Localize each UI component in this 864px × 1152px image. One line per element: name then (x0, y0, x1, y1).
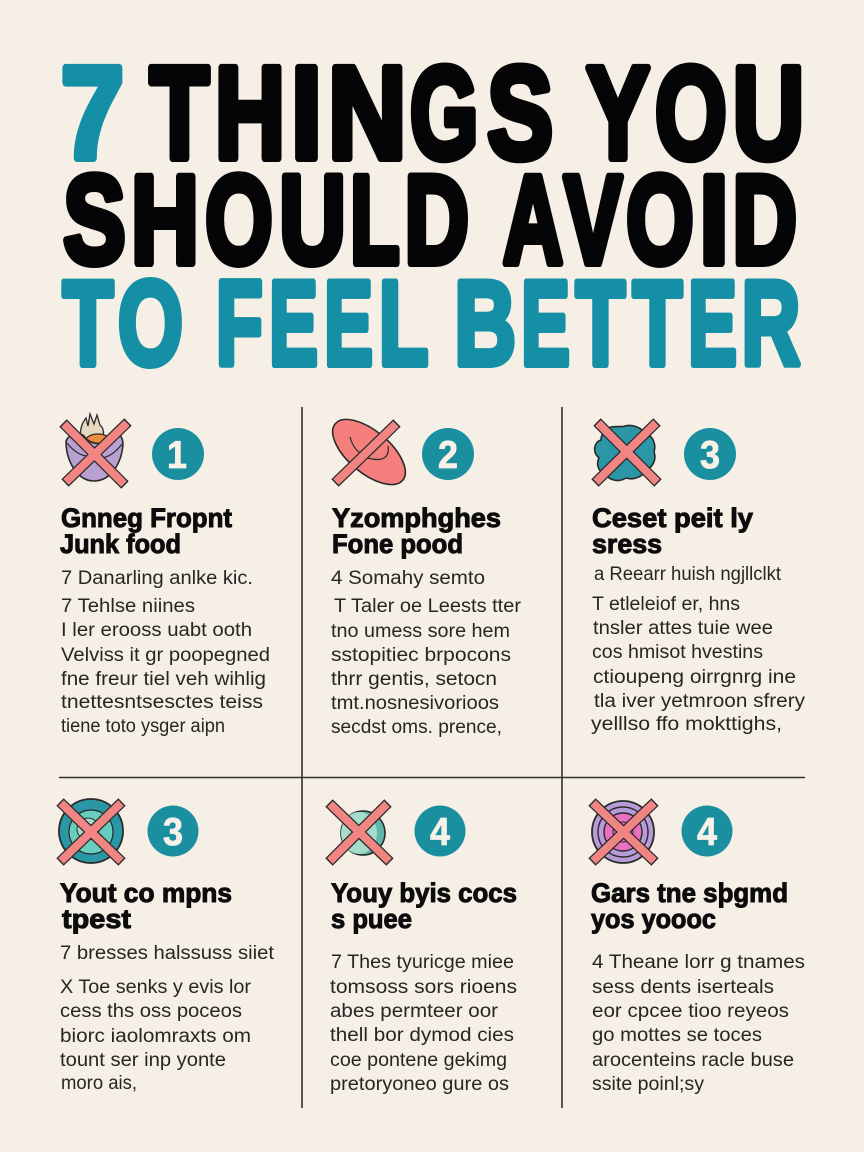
panel: item 2 (322, 408, 522, 738)
body text: 7 bresses halssuss siiet (60, 943, 275, 964)
body text: 7 Thes tyuricge miee (331, 952, 514, 973)
number badge 3 (148, 806, 198, 856)
title: D (732, 151, 797, 290)
body text: T etleleiof er, hns (592, 594, 740, 615)
heading: Gars tne sþgmd (591, 878, 788, 908)
number badge 1: 1 (167, 434, 187, 477)
number badge 3: 3 (700, 434, 720, 477)
number badge 4: 4 (430, 811, 450, 854)
heading: yos yoooc (591, 904, 716, 934)
title: R (742, 256, 800, 390)
number badge 2: 2 (438, 434, 458, 477)
title: E (269, 256, 318, 390)
body text: thrr gentis, setocn (331, 669, 497, 690)
icon: crossed-out teal blob (595, 422, 658, 483)
body text: tiene toto ysger aipn (61, 716, 225, 737)
heading: Gnneg Fropnt (61, 503, 232, 533)
heading (332, 503, 501, 559)
title: S (487, 39, 553, 186)
title: L (350, 151, 400, 290)
title: N (328, 39, 406, 186)
heading: s puee (331, 904, 412, 934)
body text: 7 Tehlse niines (61, 596, 195, 617)
title: T (576, 256, 625, 390)
panel: item 3 (591, 422, 806, 735)
body text (591, 564, 806, 735)
title: V (564, 151, 622, 290)
title: T (633, 256, 682, 390)
body text: ctioupeng oirrgnrg ine (593, 667, 796, 688)
body text: 4 Theane lorr g tnames (592, 952, 805, 973)
title: H (131, 151, 199, 290)
title: E (688, 256, 737, 390)
title: H (215, 39, 285, 186)
number badge 3 (684, 428, 736, 480)
body text: sess dents iserteals (592, 977, 774, 998)
body text: 7 Danarling anlke kic. (61, 568, 253, 589)
body text: moro ais, (61, 1073, 137, 1094)
title: A (503, 151, 563, 290)
heading (60, 503, 232, 559)
body text: tno umess sore hem (331, 621, 510, 642)
heading: sress (592, 529, 662, 559)
body text: tount ser inp yonte (60, 1050, 226, 1071)
heading: Junk food (60, 529, 181, 559)
body text: T Taler oe Leests tter (334, 596, 522, 617)
body text: sstopitiec brpocons (331, 645, 511, 666)
title: I (291, 39, 322, 186)
heading (331, 878, 517, 934)
body text: Velviss it gr poopegned (61, 645, 270, 666)
number badge 4 (682, 806, 732, 856)
title: Y (586, 39, 650, 186)
title: O (626, 151, 694, 290)
heading: Fone pood (332, 529, 463, 559)
body text: eor cpcee tioo reyeos (592, 1001, 789, 1022)
body text: 4 Somahy semto (331, 568, 485, 589)
body text: ssite poinl;sy (592, 1074, 705, 1095)
body text: fne freur tiel veh wihlig (61, 669, 266, 690)
title (61, 39, 804, 390)
body text: abes permteer oor (330, 1001, 499, 1022)
title: O (118, 256, 183, 390)
icon: crossed-out mint circle (329, 803, 390, 862)
body text (331, 568, 522, 738)
title: B (454, 256, 516, 390)
heading: Yzomphghes (332, 503, 501, 533)
body text: X Toe senks y evis lor (60, 977, 252, 998)
panel: item 5 (329, 803, 517, 1095)
title: I (700, 151, 728, 290)
body text: a Reearr huish ngjllclkt (594, 564, 782, 585)
body text: tnettesntsesctes teiss (61, 692, 263, 713)
number badge 1 (152, 428, 204, 480)
title: U (733, 39, 804, 186)
heading (60, 878, 232, 934)
title: 7 (61, 39, 124, 186)
icon: crossed-out pink food (322, 408, 416, 496)
title: L (379, 256, 427, 390)
heading: Youy byis cocs (331, 878, 517, 908)
icon: crossed-out teal plate (59, 799, 123, 863)
body text: yelllso ffo mokttighs, (591, 714, 782, 735)
body text (592, 952, 805, 1095)
title: F (216, 256, 263, 390)
body text: arocenteins racle buse (592, 1050, 794, 1071)
title: O (655, 39, 727, 186)
number badge 4: 4 (697, 811, 717, 854)
body text: coe pontene gekimg (330, 1050, 507, 1071)
body text: go mottes se toces (592, 1025, 762, 1046)
body text: biorc iaolomraxts om (60, 1026, 251, 1047)
body text: tnsler attes tuie wee (593, 618, 773, 639)
title: T (63, 256, 113, 390)
title: O (205, 151, 273, 290)
body text: pretoryoneo gure os (330, 1074, 509, 1095)
body text: cos hmisot hvestins (592, 642, 763, 663)
body text: tmt.nosnesivorioos (331, 693, 499, 714)
title: E (324, 256, 373, 390)
heading (592, 503, 753, 559)
panel: item 6 (591, 801, 805, 1095)
panel: item 4 (59, 799, 275, 1094)
body text (61, 568, 270, 737)
heading (591, 878, 788, 934)
heading: Yout co mpns (60, 878, 232, 908)
body text: cess ths oss poceos (60, 1001, 242, 1022)
icon: crossed-out purple rings (592, 801, 655, 863)
title: D (404, 151, 469, 290)
body text: I ler erooss uabt ooth (61, 620, 252, 641)
number badge 4 (414, 806, 466, 856)
icon: crossed-out food bowl (63, 414, 128, 485)
body text (60, 943, 275, 1094)
title: S (63, 151, 126, 290)
heading: tpest (62, 904, 131, 934)
title: E (521, 256, 570, 390)
body text (330, 952, 517, 1095)
title: G (410, 39, 478, 186)
panel: item 1 (60, 414, 270, 737)
body text: secdst oms. prence, (331, 717, 502, 738)
title: T (150, 39, 209, 186)
number badge 2 (422, 428, 474, 480)
body text: thell bor dymod cies (330, 1025, 514, 1046)
heading: Ceset peit ly (592, 503, 753, 533)
body text: tla iver yetmroon sfrery (594, 691, 806, 712)
title: U (279, 151, 346, 290)
body text: tomsoss sors rioens (330, 977, 517, 998)
number badge 3: 3 (163, 811, 183, 854)
